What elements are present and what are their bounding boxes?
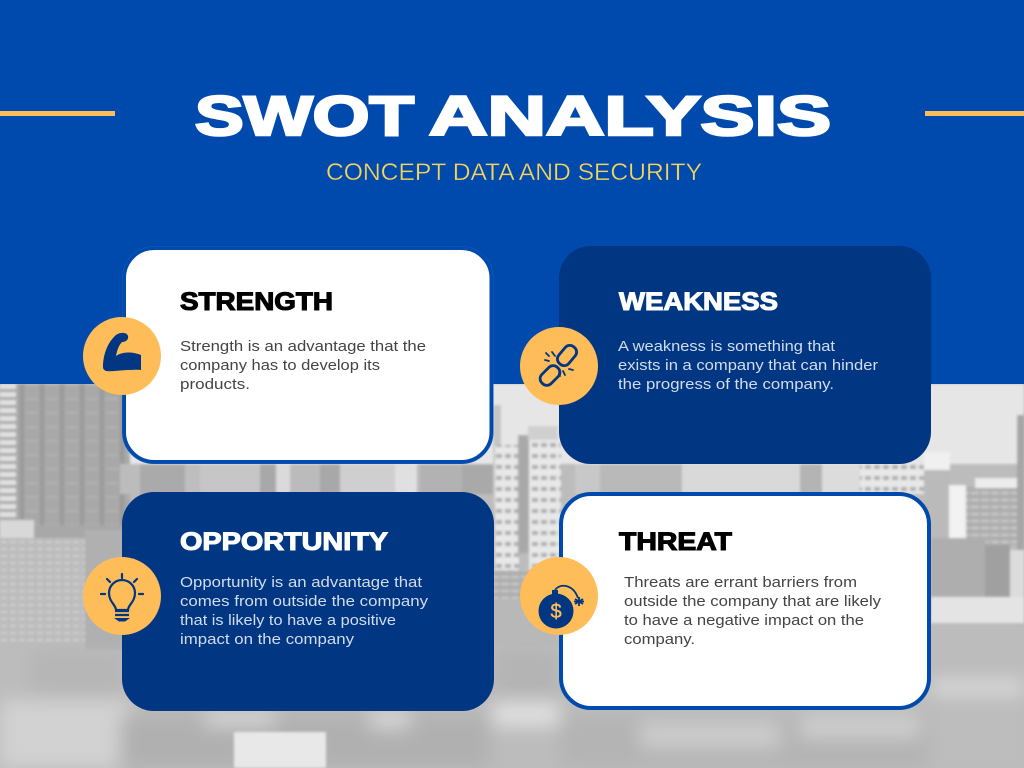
text: opportunity description: Opportunity is an advantage that: [180, 575, 422, 591]
panel: threat: [520, 494, 929, 708]
text: strength description: company has to develop its: [180, 358, 380, 374]
text: weakness description: A weakness is something that: [618, 339, 835, 355]
panel: weakness: [520, 246, 931, 464]
text: weakness description: exists in a company that can hinder: [618, 358, 878, 374]
text: opportunity description: comes from outside the company: [180, 594, 429, 610]
heading: threat: THREAT: [619, 528, 732, 556]
panel: opportunity: [83, 492, 494, 711]
title: ANALYSIS: [429, 84, 831, 147]
icon: money bomb: [520, 557, 598, 635]
icon: broken chain: [520, 327, 598, 405]
title: [195, 84, 831, 147]
background: blurred city photo: [0, 384, 1024, 768]
text: weakness description: the progress of the company.: [618, 377, 834, 393]
text: opportunity description: impact on the company: [180, 632, 355, 648]
icon: money bomb: $: [550, 601, 562, 623]
heading: weakness: WEAKNESS: [619, 288, 778, 316]
right accent line: [925, 111, 1024, 116]
subtitle: CONCEPT DATA AND SECURITY: [326, 159, 702, 186]
text: threat description: Threats are errant barriers from: [624, 575, 857, 591]
text: opportunity description: [180, 575, 429, 648]
text: weakness description: [618, 339, 878, 393]
text: strength description: Strength is an advantage that the: [180, 339, 426, 355]
top blue band: [0, 0, 1024, 384]
text: threat description: to have a negative impact on the: [624, 613, 864, 629]
text: threat description: outside the company that are likely: [624, 594, 882, 610]
text: threat description: [624, 575, 882, 648]
text: strength description: products.: [180, 377, 250, 393]
text: opportunity description: that is likely to have a positive: [180, 613, 396, 629]
icon: light bulb: [83, 557, 161, 635]
heading: strength: STRENGTH: [180, 288, 333, 316]
left accent line: [0, 111, 115, 116]
text: strength description: [180, 339, 426, 393]
icon: flexed arm: [83, 317, 161, 395]
panel: strength: [83, 246, 493, 464]
heading: opportunity: OPPORTUNITY: [180, 528, 388, 556]
title: SWOT: [195, 84, 414, 147]
text: threat description: company.: [624, 632, 695, 648]
